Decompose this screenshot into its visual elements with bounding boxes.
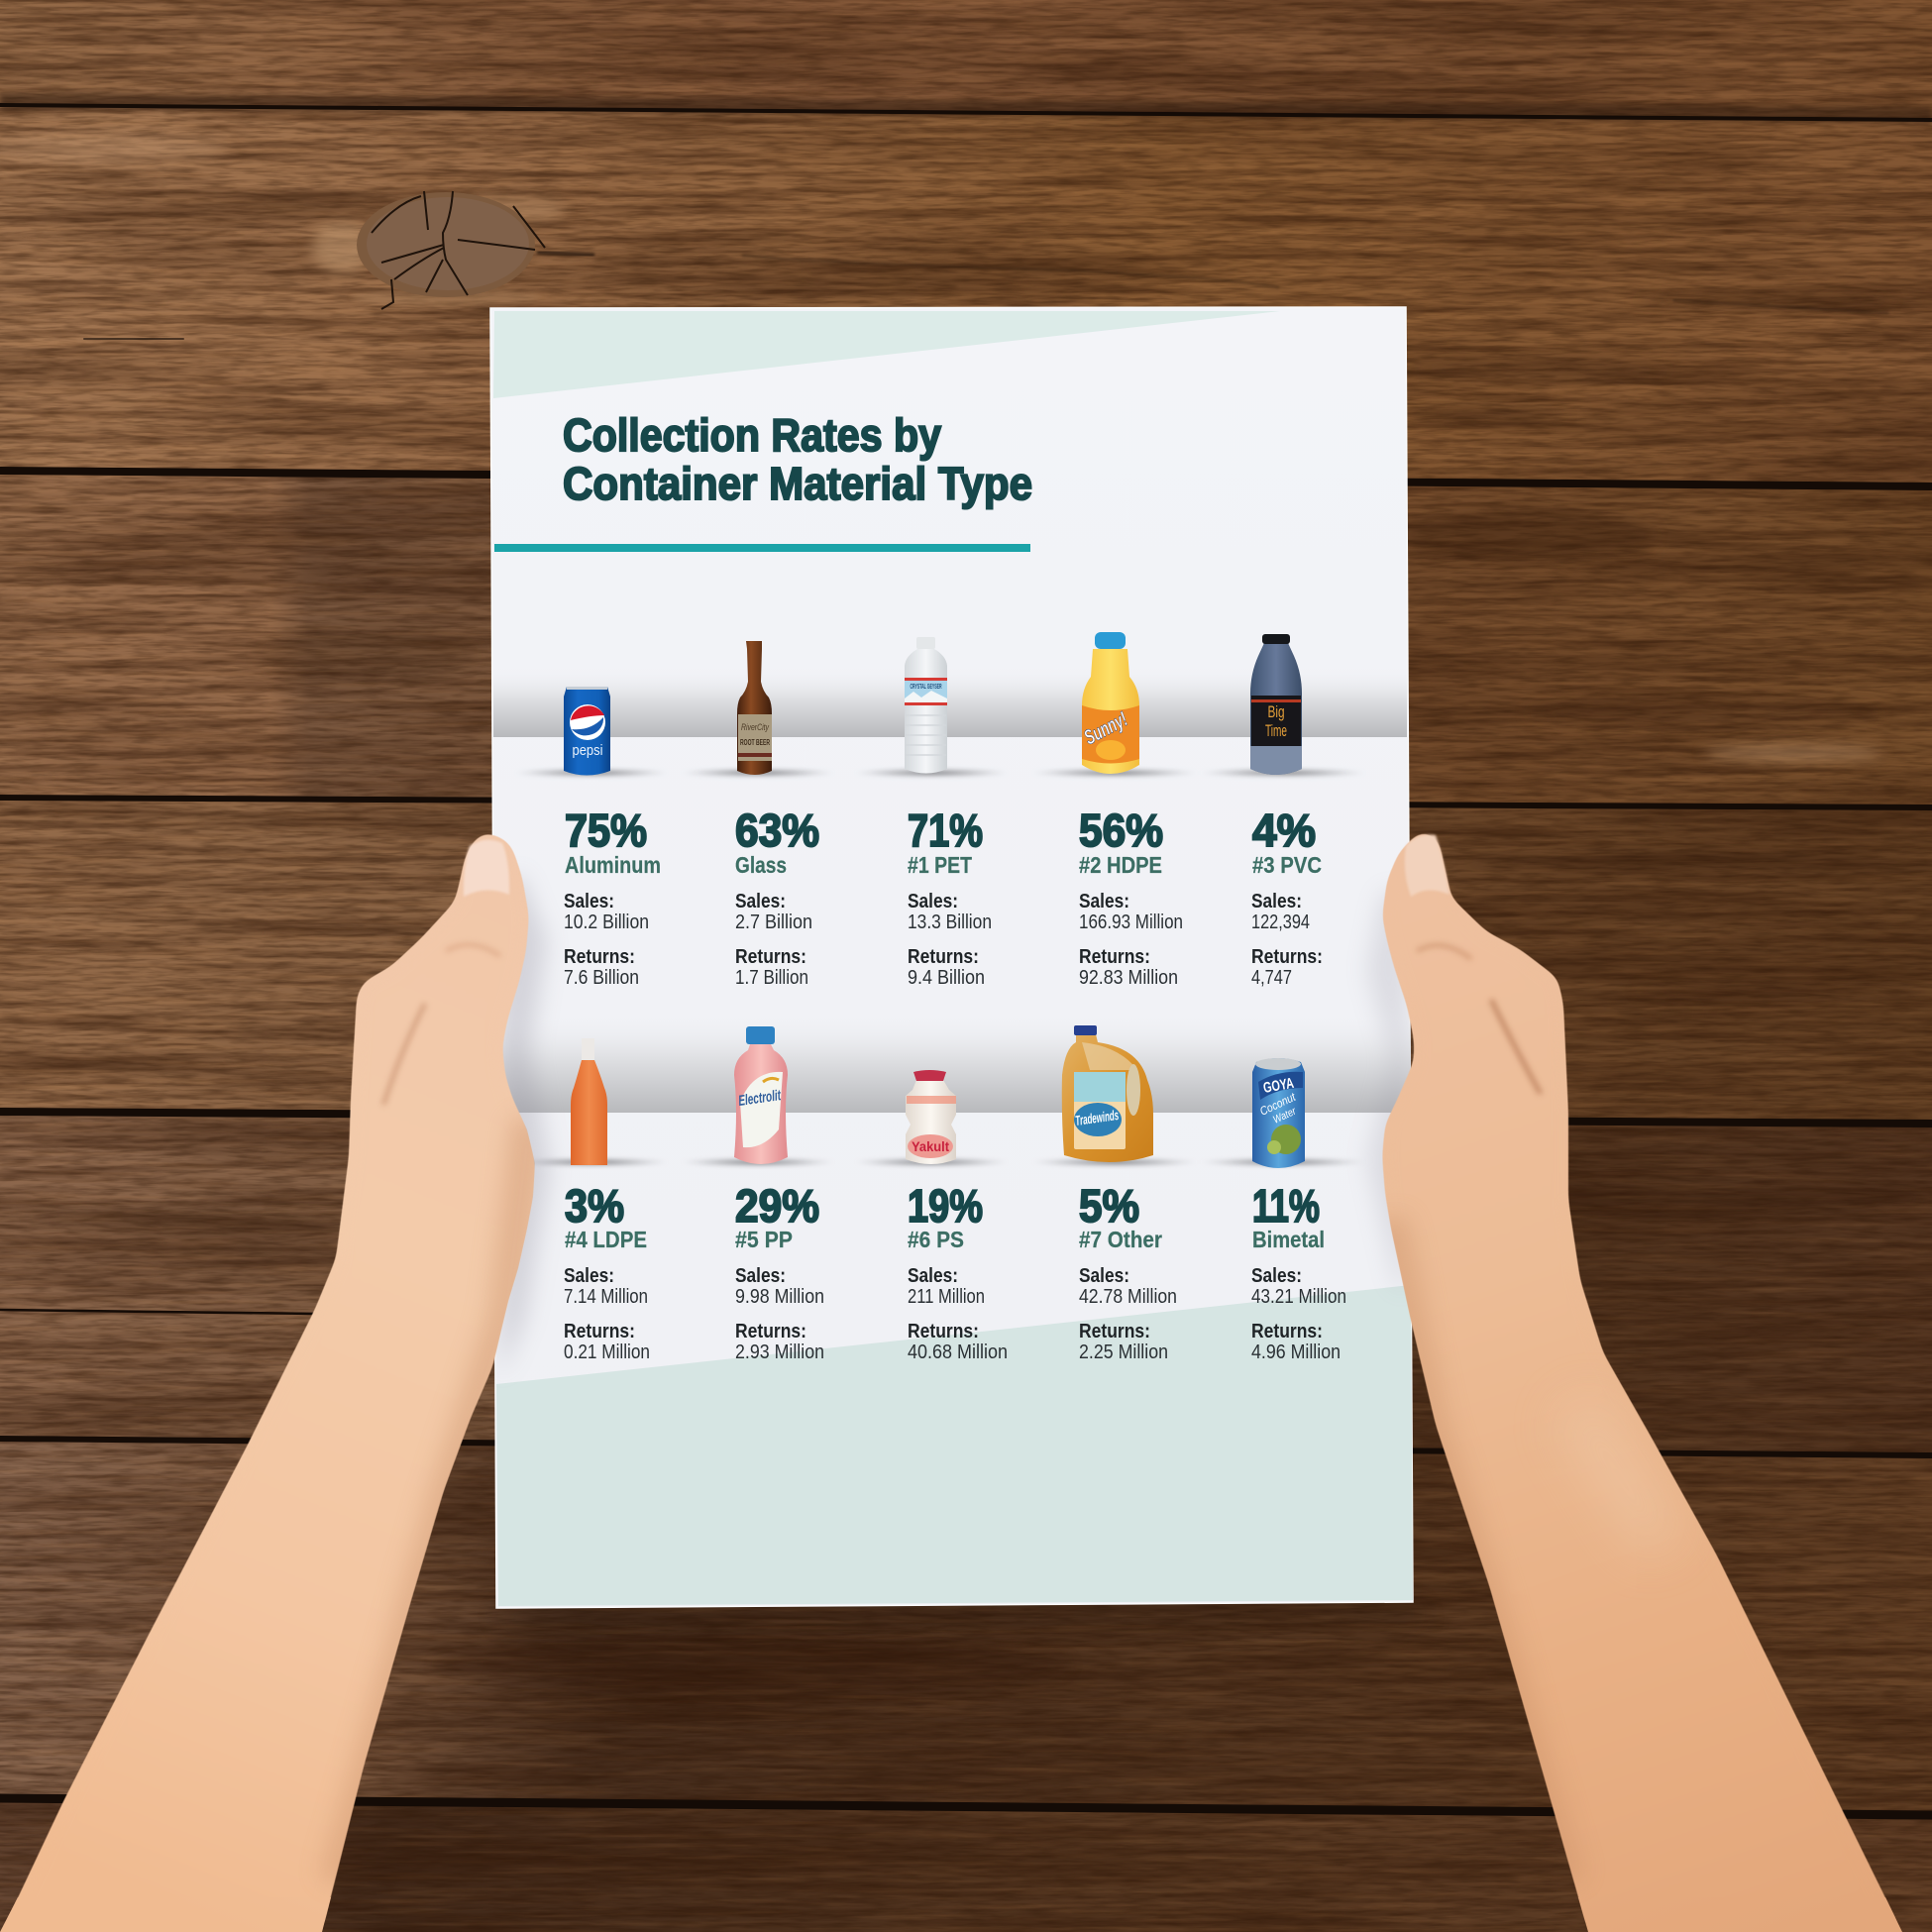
column: #6 PS: 40.68 Million bbox=[908, 1342, 1008, 1363]
icon: PVC bottle bbox=[1250, 634, 1302, 775]
icon: bimetal can: Coconut bbox=[1257, 1090, 1298, 1119]
column: #3 PVC bbox=[1251, 805, 1323, 989]
column: Aluminum: 75% bbox=[565, 805, 647, 856]
column: #7 Other: Sales: bbox=[1079, 1265, 1129, 1287]
column: #1 PET bbox=[908, 805, 992, 989]
icon: other jug: Tradewinds bbox=[1074, 1107, 1120, 1128]
column: Glass: Glass bbox=[735, 852, 787, 878]
column: #4 LDPE: #4 LDPE bbox=[565, 1227, 647, 1252]
top teal wedge bbox=[493, 311, 1280, 398]
icon: LDPE bottle bbox=[571, 1038, 607, 1165]
column: Bimetal: 43.21 Million bbox=[1251, 1286, 1346, 1308]
column: #2 HDPE bbox=[1079, 805, 1183, 989]
column: #4 LDPE: Returns: bbox=[564, 1321, 635, 1342]
icon: PET water bottle: CRYSTAL GEYSER bbox=[910, 684, 941, 691]
title: Container Material Type bbox=[563, 458, 1032, 509]
icon: glass bottle bbox=[737, 641, 772, 775]
icon: other jug bbox=[1062, 1025, 1153, 1162]
icon: bimetal can bbox=[1252, 1058, 1305, 1168]
icon: glass bottle: RiverCity bbox=[741, 722, 769, 732]
column: Glass: Returns: bbox=[735, 946, 806, 968]
column: #4 LDPE: 0.21 Million bbox=[564, 1342, 650, 1363]
column: #1 PET: 13.3 Billion bbox=[908, 912, 992, 933]
column: #5 PP: 9.98 Million bbox=[735, 1286, 824, 1308]
column: Bimetal bbox=[1251, 1180, 1346, 1363]
title bbox=[563, 409, 1032, 509]
column: #2 HDPE: #2 HDPE bbox=[1079, 852, 1162, 878]
column: #4 LDPE bbox=[564, 1180, 650, 1363]
column: #2 HDPE: Returns: bbox=[1079, 946, 1150, 968]
column: #3 PVC: 4,747 bbox=[1251, 967, 1292, 989]
column: #1 PET: Sales: bbox=[908, 891, 958, 912]
column: #7 Other bbox=[1079, 1180, 1177, 1363]
column: #7 Other: 2.25 Million bbox=[1079, 1342, 1168, 1363]
column: #1 PET: Returns: bbox=[908, 946, 979, 968]
column: #7 Other: 5% bbox=[1079, 1180, 1139, 1232]
column: Aluminum bbox=[564, 805, 661, 989]
icon: HDPE juice bottle bbox=[1081, 632, 1139, 774]
soft light patches in the wood bbox=[0, 135, 1882, 759]
column: #4 LDPE: Sales: bbox=[564, 1265, 614, 1287]
bottle floor shadows bbox=[514, 769, 1366, 1166]
column: #2 HDPE: 56% bbox=[1079, 805, 1163, 856]
left hand and arm bbox=[0, 832, 535, 1932]
column: Bimetal: 4.96 Million bbox=[1251, 1342, 1341, 1363]
right hand and arm bbox=[1382, 832, 1902, 1932]
column: #5 PP bbox=[735, 1180, 824, 1363]
column: #2 HDPE: 166.93 Million bbox=[1079, 912, 1183, 933]
column: Glass: 2.7 Billion bbox=[735, 912, 812, 933]
title: Collection Rates by bbox=[563, 409, 941, 461]
column: #7 Other: 42.78 Million bbox=[1079, 1286, 1177, 1308]
column: #4 LDPE: 7.14 Million bbox=[564, 1286, 648, 1308]
column: Bimetal: Sales: bbox=[1251, 1265, 1302, 1287]
icon: bimetal can: GOYA bbox=[1262, 1075, 1295, 1097]
icon: PS bottle bbox=[906, 1070, 956, 1164]
wood knot bbox=[312, 191, 594, 309]
icon: glass bottle: ROOT BEER bbox=[740, 738, 770, 747]
hand shadow on paper, right bbox=[1367, 892, 1407, 1288]
column: Aluminum: Aluminum bbox=[565, 852, 661, 878]
column: #5 PP: 29% bbox=[735, 1180, 819, 1232]
column: #6 PS bbox=[908, 1180, 1008, 1363]
column: #3 PVC: Returns: bbox=[1251, 946, 1323, 968]
column: #1 PET: 9.4 Billion bbox=[908, 967, 985, 989]
column: #7 Other: #7 Other bbox=[1079, 1227, 1162, 1252]
bottom teal panel bbox=[496, 1285, 1413, 1606]
icon: PP bottle bbox=[734, 1026, 788, 1164]
icon: bimetal can: Water bbox=[1271, 1105, 1299, 1127]
soft dark blotches in the wood bbox=[30, 295, 1932, 1692]
column: #6 PS: 19% bbox=[908, 1180, 983, 1232]
title underline bar bbox=[494, 544, 1030, 552]
column: Glass: Sales: bbox=[735, 891, 786, 912]
column: #3 PVC: Sales: bbox=[1251, 891, 1302, 912]
column: #5 PP: Returns: bbox=[735, 1321, 806, 1342]
column: #3 PVC: 4% bbox=[1252, 805, 1316, 856]
hand shadow on paper, left bbox=[500, 872, 550, 1377]
column: Bimetal: 11% bbox=[1252, 1180, 1320, 1232]
column: Glass: 1.7 Billion bbox=[735, 967, 808, 989]
icon: aluminum can bbox=[564, 687, 610, 775]
column: Aluminum: Sales: bbox=[564, 891, 614, 912]
column: #3 PVC: 122,394 bbox=[1251, 912, 1310, 933]
icon: PP bottle: Electrolit bbox=[737, 1087, 783, 1110]
column: Bimetal: Returns: bbox=[1251, 1321, 1323, 1342]
column: Aluminum: 7.6 Billion bbox=[564, 967, 639, 989]
column: #5 PP: 2.93 Million bbox=[735, 1342, 824, 1363]
column: #6 PS: Sales: bbox=[908, 1265, 958, 1287]
column: #2 HDPE: 92.83 Million bbox=[1079, 967, 1178, 989]
column: #2 HDPE: Sales: bbox=[1079, 891, 1129, 912]
column: #1 PET: #1 PET bbox=[908, 852, 972, 878]
icon: PVC bottle: Big bbox=[1268, 702, 1284, 721]
column: Glass: 63% bbox=[735, 805, 819, 856]
icon: aluminum can: pepsi bbox=[573, 742, 602, 759]
icon: PET water bottle bbox=[905, 637, 947, 773]
column: #6 PS: 211 Million bbox=[908, 1286, 985, 1308]
column: #4 LDPE: 3% bbox=[565, 1180, 624, 1232]
column: #5 PP: Sales: bbox=[735, 1265, 786, 1287]
poster sheet bbox=[490, 307, 1413, 1608]
column: Aluminum: Returns: bbox=[564, 946, 635, 968]
column: #6 PS: #6 PS bbox=[908, 1227, 964, 1252]
column: #5 PP: #5 PP bbox=[735, 1227, 793, 1252]
column: #7 Other: Returns: bbox=[1079, 1321, 1150, 1342]
icon: PVC bottle: Time bbox=[1265, 721, 1287, 740]
paper sheet shadow bbox=[495, 1604, 1427, 1627]
column: Glass bbox=[735, 805, 819, 989]
right thumb nail bbox=[1405, 834, 1449, 897]
column: #3 PVC: #3 PVC bbox=[1252, 852, 1322, 878]
icon: HDPE juice bottle: Sunny! bbox=[1081, 708, 1131, 749]
column: #6 PS: Returns: bbox=[908, 1321, 979, 1342]
left thumb nail bbox=[464, 840, 509, 897]
column: Bimetal: Bimetal bbox=[1252, 1227, 1325, 1252]
shelf backdrop row 2 bbox=[495, 1013, 1411, 1113]
column: #1 PET: 71% bbox=[908, 805, 983, 856]
column: Aluminum: 10.2 Billion bbox=[564, 912, 649, 933]
icon: PS bottle: Yakult bbox=[912, 1138, 949, 1154]
shelf backdrop row 1 bbox=[493, 666, 1407, 737]
